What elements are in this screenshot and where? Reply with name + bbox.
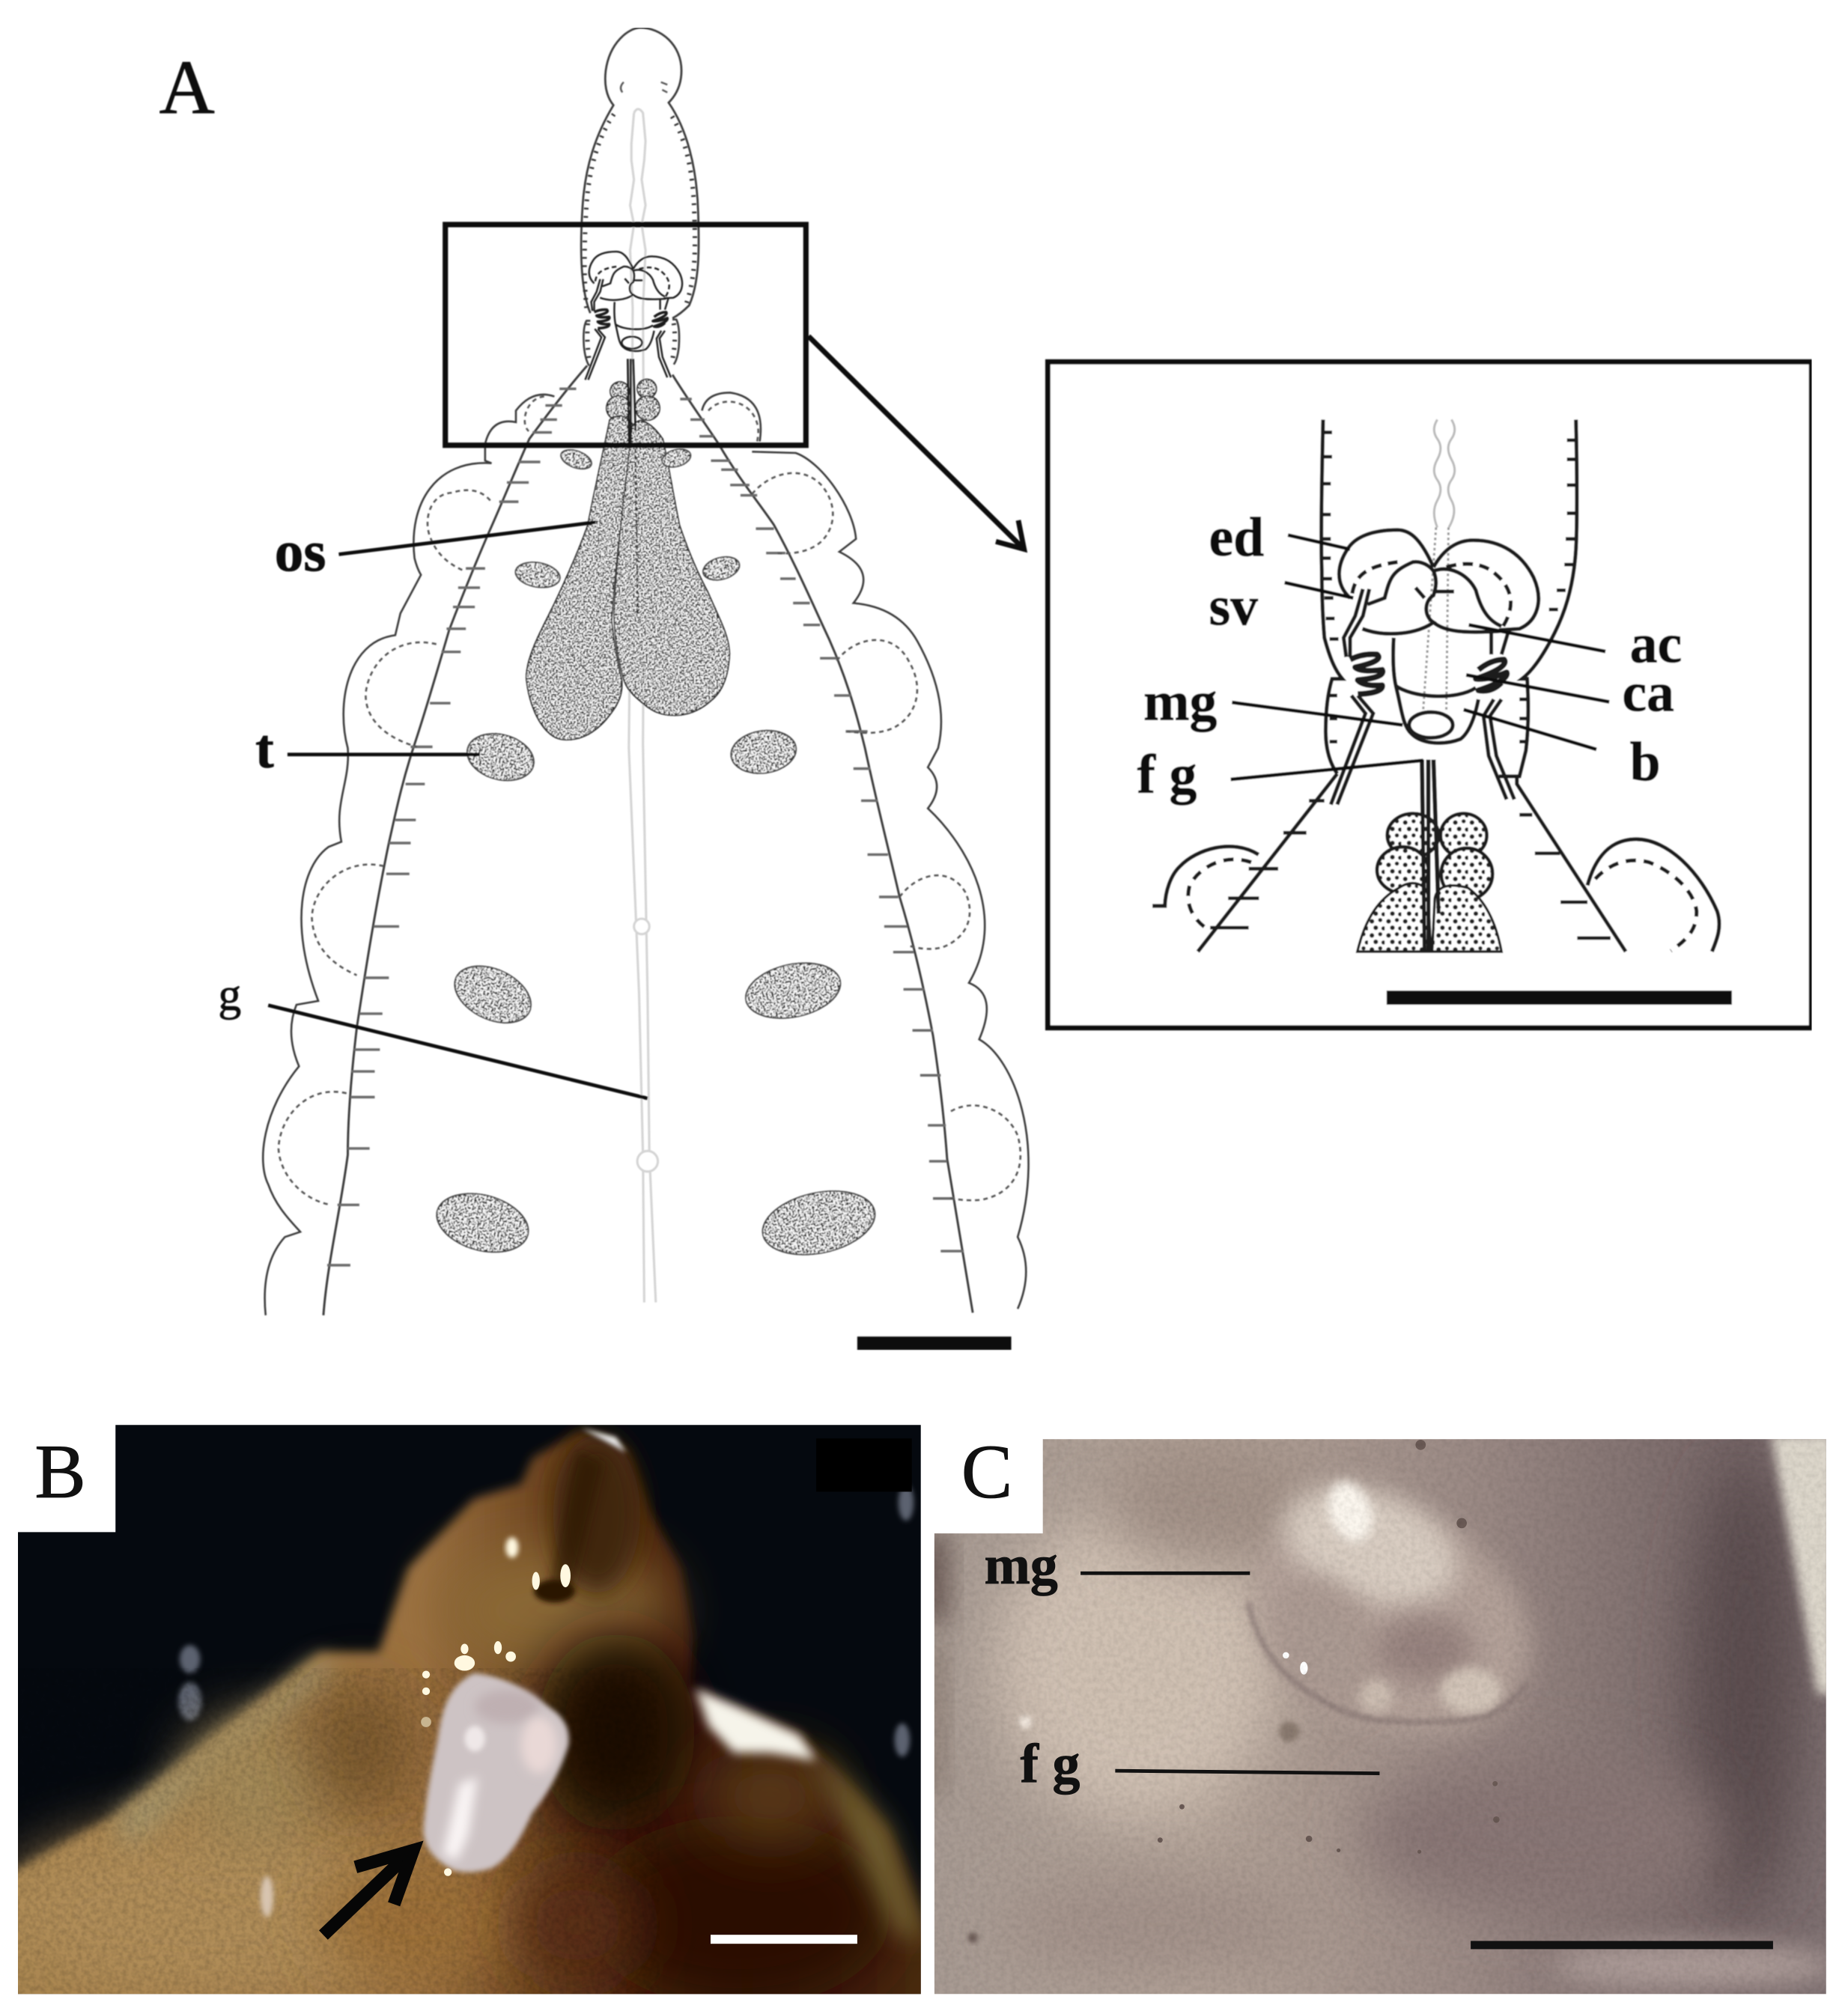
worm body: [7, 1431, 931, 2011]
central dark seam: [635, 442, 638, 616]
inset leader lines: [1231, 535, 1609, 779]
white glare: [696, 1688, 816, 1760]
scale bar A: [857, 1336, 1012, 1350]
inset scale bar: [1387, 991, 1732, 1005]
inset labels: sv: [1209, 576, 1258, 637]
body grain: [18, 1668, 660, 1994]
gut: [629, 109, 658, 1303]
inset gland lobes: [1358, 814, 1501, 952]
inset panel: [1048, 362, 1811, 1028]
label os: [275, 519, 595, 583]
outer lobes left: [263, 395, 554, 1315]
inset reproductive organs: [1331, 530, 1539, 951]
panel label C: C: [961, 1429, 1012, 1515]
anterior hole: [534, 1580, 575, 1603]
leader lines: [1080, 1573, 1379, 1774]
reproductive organs, small: [586, 252, 682, 448]
label os: os: [275, 519, 326, 583]
side lobes at neck: [583, 320, 679, 365]
panel label B: B: [34, 1429, 86, 1515]
label g: g: [218, 970, 241, 1020]
left ticks: [327, 389, 577, 1265]
panel label A: A: [159, 45, 215, 130]
labels: [985, 1534, 1080, 1795]
inset labels: ed: [1209, 506, 1264, 568]
detail rectangle: [446, 225, 806, 445]
bright right edge: [1771, 1435, 1835, 1694]
small anterior lobes: [606, 379, 660, 421]
panel A: whole worm line drawing: [159, 28, 1811, 1350]
label g: [218, 970, 648, 1098]
gland: [1218, 1463, 1567, 1775]
head outline: [581, 28, 699, 318]
background: [934, 1438, 1828, 1995]
body tone patches: [0, 1435, 924, 2008]
inset gut: [1423, 419, 1455, 712]
dashed vesicles: [279, 397, 1021, 1205]
right ticks: [680, 399, 964, 1251]
label t: t: [255, 718, 274, 779]
specular highlights: [261, 1537, 571, 1917]
labels: f g: [1021, 1733, 1080, 1795]
white body in centre: pearl: [424, 1673, 569, 1872]
inset body walls: [1198, 419, 1626, 952]
background: [18, 1424, 922, 1994]
panel B: photo: [0, 1424, 931, 2011]
inset labels: b: [1630, 731, 1661, 792]
inset ticks: [1210, 433, 1611, 938]
inset labels: [1137, 506, 1682, 805]
spots: [967, 1440, 1731, 1943]
inset dashed vesicles: [1188, 860, 1697, 951]
testes: [429, 445, 881, 1265]
arrow: [323, 1850, 413, 1935]
body margins: [323, 365, 973, 1315]
outer lobes right: [702, 392, 1029, 1309]
black square mask: [816, 1438, 912, 1491]
panel C: photo: [917, 1435, 1835, 1995]
inset tube over lobes: [1422, 760, 1438, 951]
scale bar C: [1471, 1941, 1773, 1949]
head ticks: [585, 113, 695, 359]
inset labels: mg: [1143, 670, 1217, 731]
head eye marks: [621, 82, 667, 92]
tone patches: [917, 1437, 1835, 1992]
top tip highlight: [581, 1429, 626, 1452]
arrow to inset: [809, 336, 1024, 550]
surface grain: [934, 1438, 1828, 1995]
inset labels: f g: [1137, 743, 1197, 805]
oviducal-style gland lobes (os): [526, 416, 730, 740]
inset labels: ac: [1630, 612, 1682, 674]
labels: mg: [985, 1534, 1058, 1595]
inset frame: [1048, 362, 1811, 1028]
inset labels: ca: [1622, 661, 1674, 722]
white scale bar: [711, 1935, 857, 1944]
inset lobes: [1152, 839, 1719, 952]
